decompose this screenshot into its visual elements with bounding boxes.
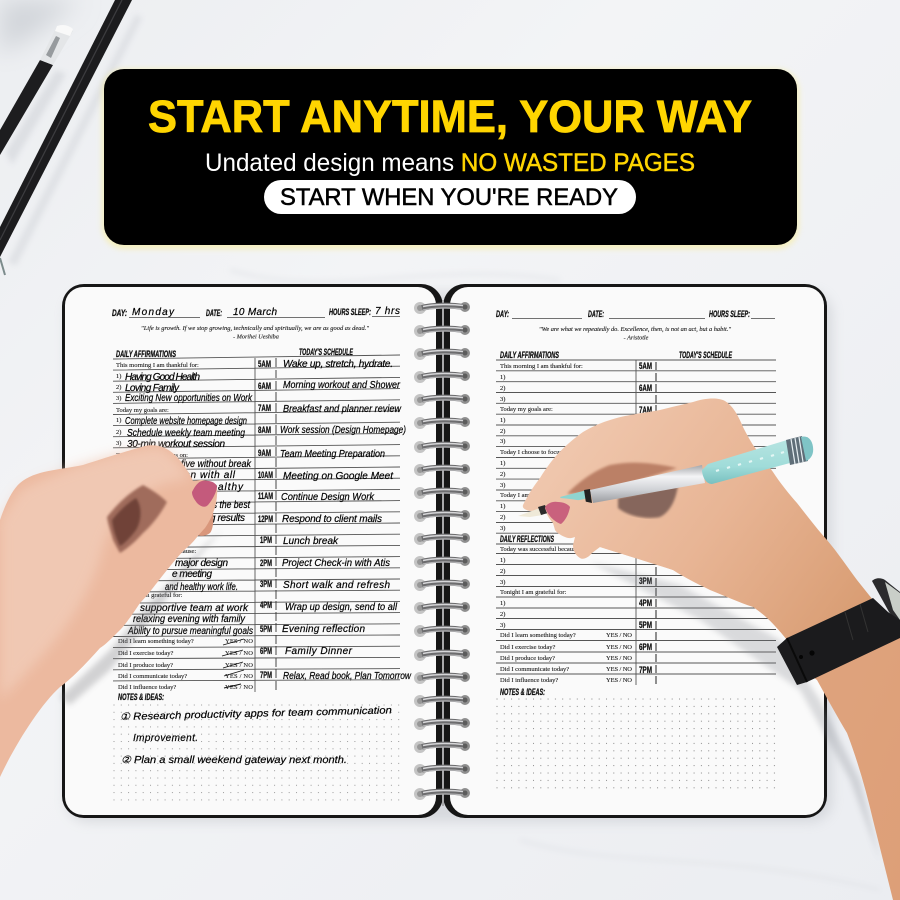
- right page printed prompts: 3): [500, 579, 505, 586]
- left page printed prompts: Today was successful because:: [116, 548, 196, 555]
- left page section headings: [116, 347, 354, 702]
- right page printed prompts: 1): [500, 557, 505, 564]
- left page handwritten affirmations: supportive team at work: [140, 603, 249, 614]
- right page schedule times: 5PM: [639, 620, 652, 630]
- right page printed prompts: Did I communicate today?: [500, 666, 569, 673]
- right page section headings: [500, 350, 733, 697]
- left page header fields: Monday: [132, 307, 175, 318]
- left page schedule times: 11AM: [258, 491, 273, 501]
- left page handwritten affirmations: Ability to pursue meaningful goals: [127, 626, 253, 637]
- left page handwritten schedule: Meeting on Google Meet: [283, 471, 394, 482]
- left page schedule times: 8AM: [258, 425, 271, 435]
- right page printed prompts: 1): [500, 417, 505, 424]
- left page handwritten affirmations: Complete website homepage design: [125, 416, 247, 427]
- right page printed prompts: YES / NO: [606, 677, 632, 684]
- left page schedule times: 5PM: [260, 624, 272, 634]
- right page printed prompts: Today I am excited about:: [500, 492, 568, 499]
- right page schedule times: 6PM: [639, 642, 652, 652]
- left page section headings: TODAY'S SCHEDULE: [299, 347, 354, 357]
- right page printed prompts: YES / NO: [606, 666, 632, 673]
- left page handwritten affirmations: e meeting: [172, 569, 212, 580]
- left page quote: "Life is growth. If we stop growing, technically and spiritually, we are as good as dead.": [141, 325, 369, 332]
- left page handwritten schedule: Family Dinner: [285, 646, 353, 657]
- left page handwritten schedule: [280, 359, 412, 682]
- right page section headings: DAILY AFFIRMATIONS: [500, 350, 559, 360]
- left page handwritten affirmations: es the best: [208, 500, 251, 511]
- right page schedule times: 7PM: [639, 665, 652, 675]
- left page printed prompts: YES / NO: [225, 638, 253, 645]
- right page header fields: DATE:: [588, 309, 604, 319]
- left page schedule times: 6PM: [260, 646, 272, 656]
- banner: [102, 69, 799, 249]
- right page schedule ticks: [655, 362, 657, 684]
- palm and arm: [0, 445, 217, 777]
- left page schedule times: 9AM: [258, 448, 271, 458]
- palm highlight: [0, 447, 190, 700]
- left page handwritten notes: Improvement.: [133, 733, 198, 744]
- left page header fields: 7 hrs: [375, 306, 400, 317]
- right page printed prompts: 3): [500, 525, 505, 532]
- right page printed prompts: 2): [500, 568, 505, 575]
- left page handwritten schedule: Breakfast and planner review: [283, 404, 402, 415]
- left page schedule times: 1PM: [260, 535, 272, 545]
- right page header fields: DAY:: [496, 309, 509, 319]
- right page schedule times: 5AM: [639, 361, 652, 371]
- right page quote: - Aristotle: [624, 334, 649, 342]
- right page header fields: HOURS SLEEP:: [709, 309, 750, 319]
- right page printed prompts: Did I influence today?: [500, 677, 558, 684]
- left page handwritten affirmations: major design: [175, 558, 228, 569]
- left page handwritten affirmations: relaxing evening with family: [133, 614, 246, 625]
- left page printed prompts: 2): [116, 384, 121, 391]
- right page printed prompts: YES / NO: [606, 644, 632, 651]
- left page schedule times: 5AM: [258, 359, 271, 369]
- left page handwritten schedule: Short walk and refresh: [283, 580, 390, 591]
- left page printed prompts: Today I can do better because:: [116, 493, 195, 500]
- left page printed prompts: This morning I am thankful for:: [116, 362, 199, 369]
- left page handwritten affirmations: Having Good Health: [125, 372, 200, 383]
- left page printed prompts: YES / NO: [225, 650, 253, 657]
- right page table rules: [496, 360, 776, 685]
- wristwatch: [777, 578, 900, 685]
- pen: [518, 436, 813, 517]
- left page printed prompts: YES / NO: [225, 684, 253, 691]
- left page printed prompts: Did I produce today?: [118, 662, 173, 669]
- thumb: [545, 498, 700, 585]
- left page header fields: DAY:: [112, 308, 127, 318]
- left page printed prompts: 3): [116, 395, 121, 402]
- left page printed prompts: Today I choose to focus on:: [116, 452, 188, 459]
- right page printed prompts: 3): [500, 622, 505, 629]
- right page printed prompts: 1): [500, 600, 505, 607]
- banner subtitle: Undated design means NO WASTED PAGES: [205, 149, 695, 177]
- left page schedule times: 6AM: [258, 381, 271, 391]
- left page handwritten affirmations: Loving Family: [125, 383, 180, 394]
- left page schedule times: 12PM: [258, 514, 273, 524]
- left page dot grid: [113, 704, 405, 802]
- left page handwritten affirmations: Schedule weekly team meeting: [127, 428, 245, 439]
- right page section headings: TODAY'S SCHEDULE: [679, 350, 733, 360]
- right page printed prompts: [500, 363, 632, 684]
- right page printed prompts: 1): [500, 503, 505, 510]
- left page quote: [141, 325, 369, 340]
- hollow above the pen: [567, 463, 677, 494]
- left page schedule times: 7PM: [260, 670, 272, 680]
- left page schedule times: 3PM: [260, 579, 272, 589]
- right page printed prompts: 2): [500, 514, 505, 521]
- right page header fields: [496, 309, 775, 319]
- left page handwritten schedule: Team Meeting Preparation: [280, 449, 385, 460]
- left page handwritten notes: [120, 705, 392, 766]
- right page section headings: DAILY REFLECTIONS: [500, 534, 554, 544]
- left page table rules: [113, 355, 400, 692]
- right page schedule times: 6AM: [639, 383, 652, 393]
- right page printed prompts: Did I exercise today?: [500, 644, 556, 651]
- right page printed prompts: 2): [500, 471, 505, 478]
- right page printed prompts: 3): [500, 482, 505, 489]
- left page handwritten affirmations: five without break: [181, 459, 252, 470]
- right page schedule times: 4PM: [639, 598, 652, 608]
- left page schedule times: 2PM: [260, 558, 272, 568]
- left page section headings: DAILY AFFIRMATIONS: [116, 349, 176, 359]
- left page handwritten schedule: Respond to client mails: [282, 514, 382, 525]
- right page printed prompts: Today was successful because:: [500, 546, 580, 553]
- left page schedule times: 10AM: [258, 470, 273, 480]
- left hand: [0, 445, 222, 777]
- left page handwritten notes: ② Plan a small weekend gateway next month.: [121, 755, 347, 766]
- left page handwritten schedule: Continue Design Work: [281, 492, 375, 503]
- left page printed prompts: 2): [116, 429, 121, 436]
- left page handwritten schedule: Wake up, stretch, hydrate.: [283, 359, 393, 370]
- hollow between thumb and finger: [107, 485, 167, 553]
- right page printed prompts: 2): [500, 385, 505, 392]
- left page printed prompts: Today my goals are:: [116, 407, 169, 414]
- right page printed prompts: YES / NO: [606, 632, 632, 639]
- left page handwritten affirmations: tion with all: [178, 470, 236, 481]
- right page schedule times: [639, 361, 652, 675]
- right page schedule times: 7AM: [639, 405, 652, 415]
- right page printed prompts: 2): [500, 611, 505, 618]
- left page printed prompts: 3): [116, 440, 121, 447]
- thumb nail: [545, 502, 570, 524]
- left page schedule ticks: [275, 358, 277, 690]
- left page schedule times: 7AM: [258, 403, 271, 413]
- fingertip behind index finger: [192, 505, 213, 536]
- left page section headings: NOTES & IDEAS:: [118, 692, 164, 702]
- right page section headings: NOTES & IDEAS:: [500, 687, 545, 697]
- left page handwritten schedule: Evening reflection: [282, 624, 365, 635]
- left page printed prompts: Did I exercise today?: [118, 650, 174, 657]
- spiral binding: [414, 300, 470, 806]
- right page dot grid: [496, 698, 779, 790]
- left page header fields: DATE:: [206, 308, 222, 318]
- left page printed prompts: 1): [116, 417, 121, 424]
- left page header fields: 10 March: [233, 307, 277, 318]
- forearm: [790, 630, 900, 900]
- left page printed prompts: YES / NO: [225, 673, 253, 680]
- notebook shadow: [66, 292, 832, 822]
- left page handwritten affirmations: [125, 372, 253, 637]
- right page printed prompts: 3): [500, 438, 505, 445]
- banner title: START ANYTIME, YOUR WAY: [148, 91, 752, 142]
- left page handwritten schedule: Work session (Design Homepage): [280, 425, 406, 436]
- left page handwritten notes: ① Research productivity apps for team communication: [120, 705, 392, 723]
- banner pill: START WHEN YOU'RE READY: [280, 184, 618, 211]
- left page printed prompts: 1): [116, 373, 121, 380]
- left page handwritten affirmations: and healthy work life.: [165, 582, 238, 593]
- panel: left notebook page: [62, 284, 443, 818]
- left page schedule times: [258, 359, 273, 680]
- right page schedule times: 3PM: [639, 576, 652, 586]
- right page printed prompts: Today I choose to focus on:: [500, 449, 572, 456]
- left page handwritten affirmations: 30-min workout session: [127, 439, 225, 450]
- left page printed prompts: Did I learn something today?: [118, 638, 194, 645]
- left page handwritten schedule: Project Check-in with Atis: [282, 558, 390, 569]
- left page printed prompts: [116, 362, 253, 691]
- left page handwritten schedule: Lunch break: [283, 536, 339, 547]
- pencil with eraser, top left: [0, 25, 73, 165]
- hollow below the pen: [618, 485, 678, 518]
- right page printed prompts: Did I learn something today?: [500, 632, 576, 639]
- pencil, long black: [0, 0, 142, 275]
- panel: right notebook page: [443, 284, 827, 818]
- left page quote: - Morihei Ueshiba: [233, 334, 279, 340]
- left page schedule times: 4PM: [260, 600, 272, 610]
- right page printed prompts: 3): [500, 396, 505, 403]
- right page printed prompts: This morning I am thankful for:: [500, 363, 583, 370]
- painted nail: [192, 481, 217, 507]
- right page printed prompts: YES / NO: [606, 655, 632, 662]
- right page printed prompts: 1): [500, 460, 505, 467]
- left page header fields: HOURS SLEEP:: [329, 307, 371, 317]
- left page handwritten affirmations: healthy: [205, 482, 244, 493]
- left page handwritten schedule: Morning workout and Shower: [283, 380, 401, 391]
- left page handwritten schedule: Wrap up design, send to all: [285, 602, 398, 613]
- right page printed prompts: 1): [500, 374, 505, 381]
- right page printed prompts: Tonight I am grateful for:: [500, 589, 567, 596]
- palm and fingers: [523, 398, 873, 640]
- left page printed prompts: Did I influence today?: [118, 684, 176, 691]
- right page printed prompts: 2): [500, 428, 505, 435]
- right page quote: [539, 326, 731, 342]
- right page printed prompts: Did I produce today?: [500, 655, 555, 662]
- right hand: [518, 398, 900, 900]
- right page printed prompts: Today my goals are:: [500, 406, 553, 413]
- right page quote: "We are what we repeatedly do. Excellence, then, is not an act, but a habit.": [539, 326, 731, 333]
- left page handwritten affirmations: ig results: [208, 513, 245, 524]
- left page handwritten affirmations: Exciting New opportunities on Work: [125, 393, 253, 404]
- left page header fields: [112, 306, 400, 318]
- left page handwritten schedule: Relax, Read book, Plan Tomorrow: [283, 671, 412, 682]
- left page printed prompts: Tonight I am grateful for:: [116, 592, 183, 599]
- left page printed prompts: Did I communicate today?: [118, 673, 187, 680]
- left page printed prompts: YES / NO: [225, 662, 253, 669]
